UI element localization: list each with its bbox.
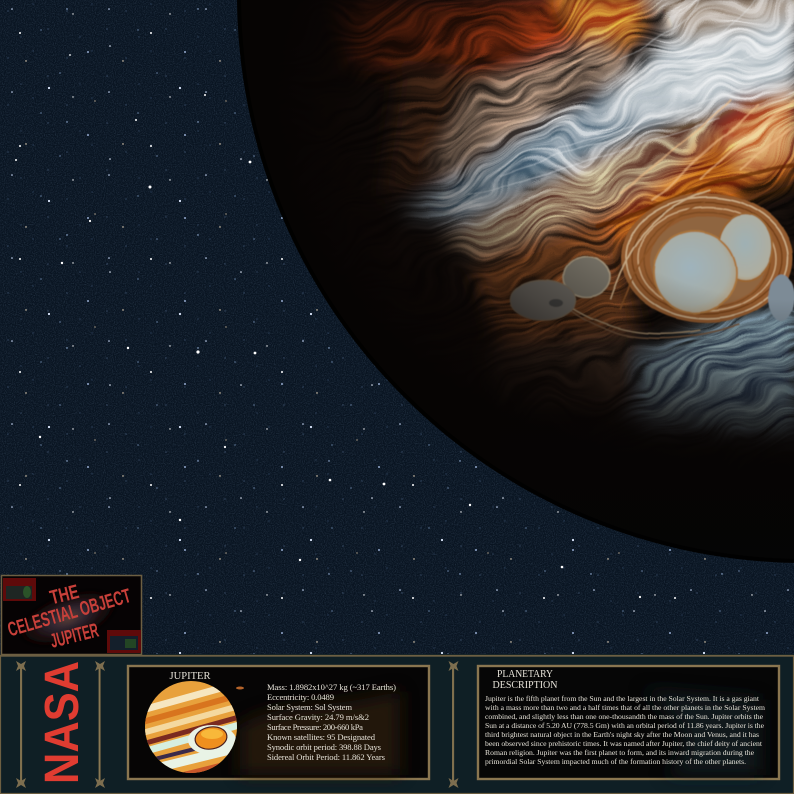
fine turbulent cloud texture bbox=[345, 0, 794, 434]
description text: with a mass more than two and a half times that of all the other planets in the Solar System bbox=[485, 703, 765, 712]
title text: THE bbox=[48, 581, 81, 609]
description text: combined, and slightly less than one one-thousandth the mass of the Sun. Jupiter orbits the bbox=[485, 712, 764, 721]
heading: JUPITER bbox=[170, 671, 211, 682]
ornament rod middle bbox=[95, 661, 105, 788]
title text bbox=[5, 581, 133, 653]
title text: JUPITER bbox=[48, 620, 101, 653]
heading bbox=[492, 669, 558, 691]
facts list: Sidereal Orbit Period: 11.862 Years bbox=[267, 752, 386, 762]
description text: Sun at a distance of 5.20 AU (778.5 Gm) with an orbital period of 11.86 years. Jupiter is the bbox=[485, 721, 765, 730]
decorative nebula bbox=[240, 690, 400, 775]
ornament rod left bbox=[16, 661, 26, 788]
small inset red box bottom bbox=[107, 630, 141, 653]
panel: planetary description bbox=[478, 666, 779, 779]
description text: primordial Solar System impacted much of the formation history of the other planets. bbox=[485, 757, 746, 766]
heading: PLANETARY bbox=[497, 669, 553, 680]
description text: Roman religion. Jupiter was the first planet to form, and its inward migration during the bbox=[485, 748, 755, 757]
small inset red box top bbox=[3, 578, 36, 601]
title text: CELESTIAL OBJECT bbox=[5, 585, 133, 641]
facts list: Surface Pressure: 200-660 kPa bbox=[267, 722, 363, 732]
galaxy backdrop bbox=[13, 580, 123, 656]
icon: Jupiter illustration bbox=[145, 681, 237, 773]
footer band bbox=[0, 654, 794, 794]
description text: third brightest natural object in the Earth's night sky after the Moon and Venus, and it has bbox=[485, 730, 759, 739]
facts list: Surface Gravity: 24.79 m/s&2 bbox=[267, 712, 369, 722]
facts list: Known satellites: 95 Designated bbox=[267, 732, 376, 742]
panel: Jupiter facts bbox=[128, 666, 429, 785]
NASA logo: NASA bbox=[36, 661, 89, 784]
facts list: Mass: 1.8982x10^27 kg (~317 Earths) bbox=[267, 682, 396, 692]
ornament rod right bbox=[448, 661, 458, 788]
swirling cloud streaks bbox=[470, 0, 794, 228]
night-side shading bbox=[230, 0, 794, 580]
facts list: Eccentricity: 0.0489 bbox=[267, 692, 334, 702]
heading: DESCRIPTION bbox=[492, 680, 558, 691]
description text: Jupiter is the fifth planet from the Sun and the largest in the Solar System. It is a gas giant bbox=[485, 694, 760, 703]
facts list: Solar System: Sol System bbox=[267, 702, 352, 712]
title panel: The Celestial Object Jupiter bbox=[2, 576, 142, 656]
facts list bbox=[267, 682, 396, 762]
facts list: Synodic orbit period: 398.88 Days bbox=[267, 742, 382, 752]
cloud colour zones bbox=[330, 0, 794, 440]
great storm ovals bbox=[510, 190, 794, 338]
description text: been observed since prehistoric times. It was named after Jupiter, the chief deity of ancient bbox=[485, 739, 763, 748]
planet Jupiter bbox=[237, 0, 794, 563]
description text bbox=[485, 694, 765, 766]
